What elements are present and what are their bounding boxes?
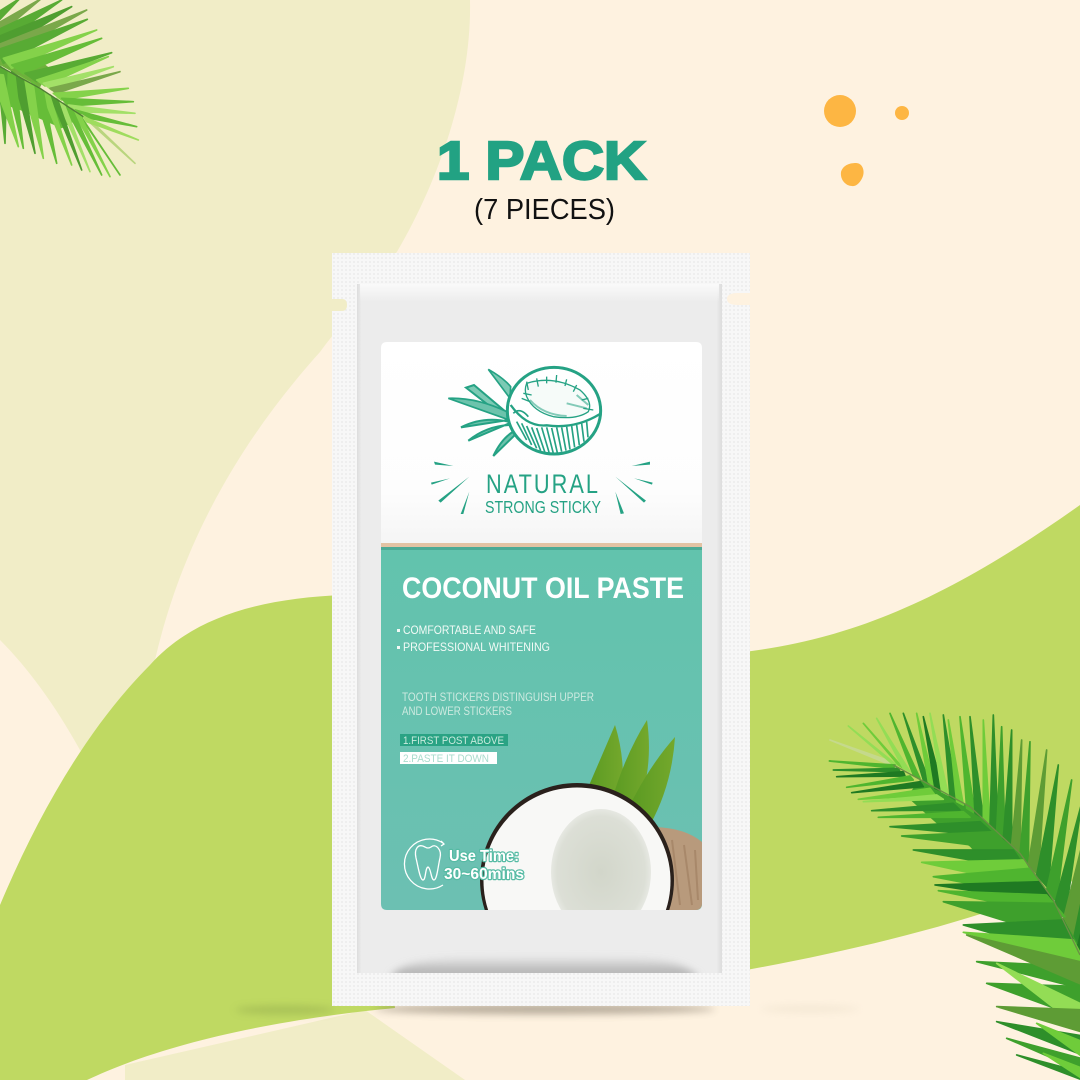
icon: palm frond bottom right [829, 713, 1080, 1080]
subheading: 7 pieces: (7 PIECES) [474, 194, 615, 226]
icon: palm frond top left [0, 0, 138, 177]
sachet seal border [332, 253, 750, 1006]
use time text: Use Time: [449, 848, 519, 865]
usage note [402, 692, 594, 718]
panel: sachet pack [332, 253, 750, 1006]
icon: coconut logo [448, 367, 601, 456]
coconut photo [480, 720, 702, 910]
decorative orange dots [824, 95, 909, 186]
brand text: strong sticky: STRONG STICKY [485, 497, 601, 517]
use time text [444, 848, 524, 883]
use time text: 30~60mins [444, 866, 524, 883]
label divider [381, 543, 702, 547]
label white top [381, 342, 702, 543]
brand text: natural: NATURAL [486, 469, 600, 499]
icon: rays [431, 462, 653, 514]
panel: product label [381, 342, 702, 910]
step 1 tag: 1.FIRST POST ABOVE [403, 735, 504, 747]
usage note: AND LOWER STICKERS [402, 706, 512, 718]
step 2 tag: 2.PASTE IT DOWN [403, 753, 489, 765]
product title: COCONUT OIL PASTE [402, 572, 684, 605]
usage note: TOOTH STICKERS DISTINGUISH UPPER [402, 692, 594, 704]
sachet inner panel [357, 284, 722, 973]
pack shadow [235, 1004, 860, 1014]
icon: tooth timer [404, 839, 444, 889]
benefits list [397, 623, 550, 654]
benefits list: COMFORTABLE AND SAFE [403, 623, 536, 637]
label teal area [381, 547, 702, 910]
benefits list: PROFESSIONAL WHITENING [403, 640, 550, 654]
heading: 1 pack: 1 PACK [437, 131, 646, 191]
